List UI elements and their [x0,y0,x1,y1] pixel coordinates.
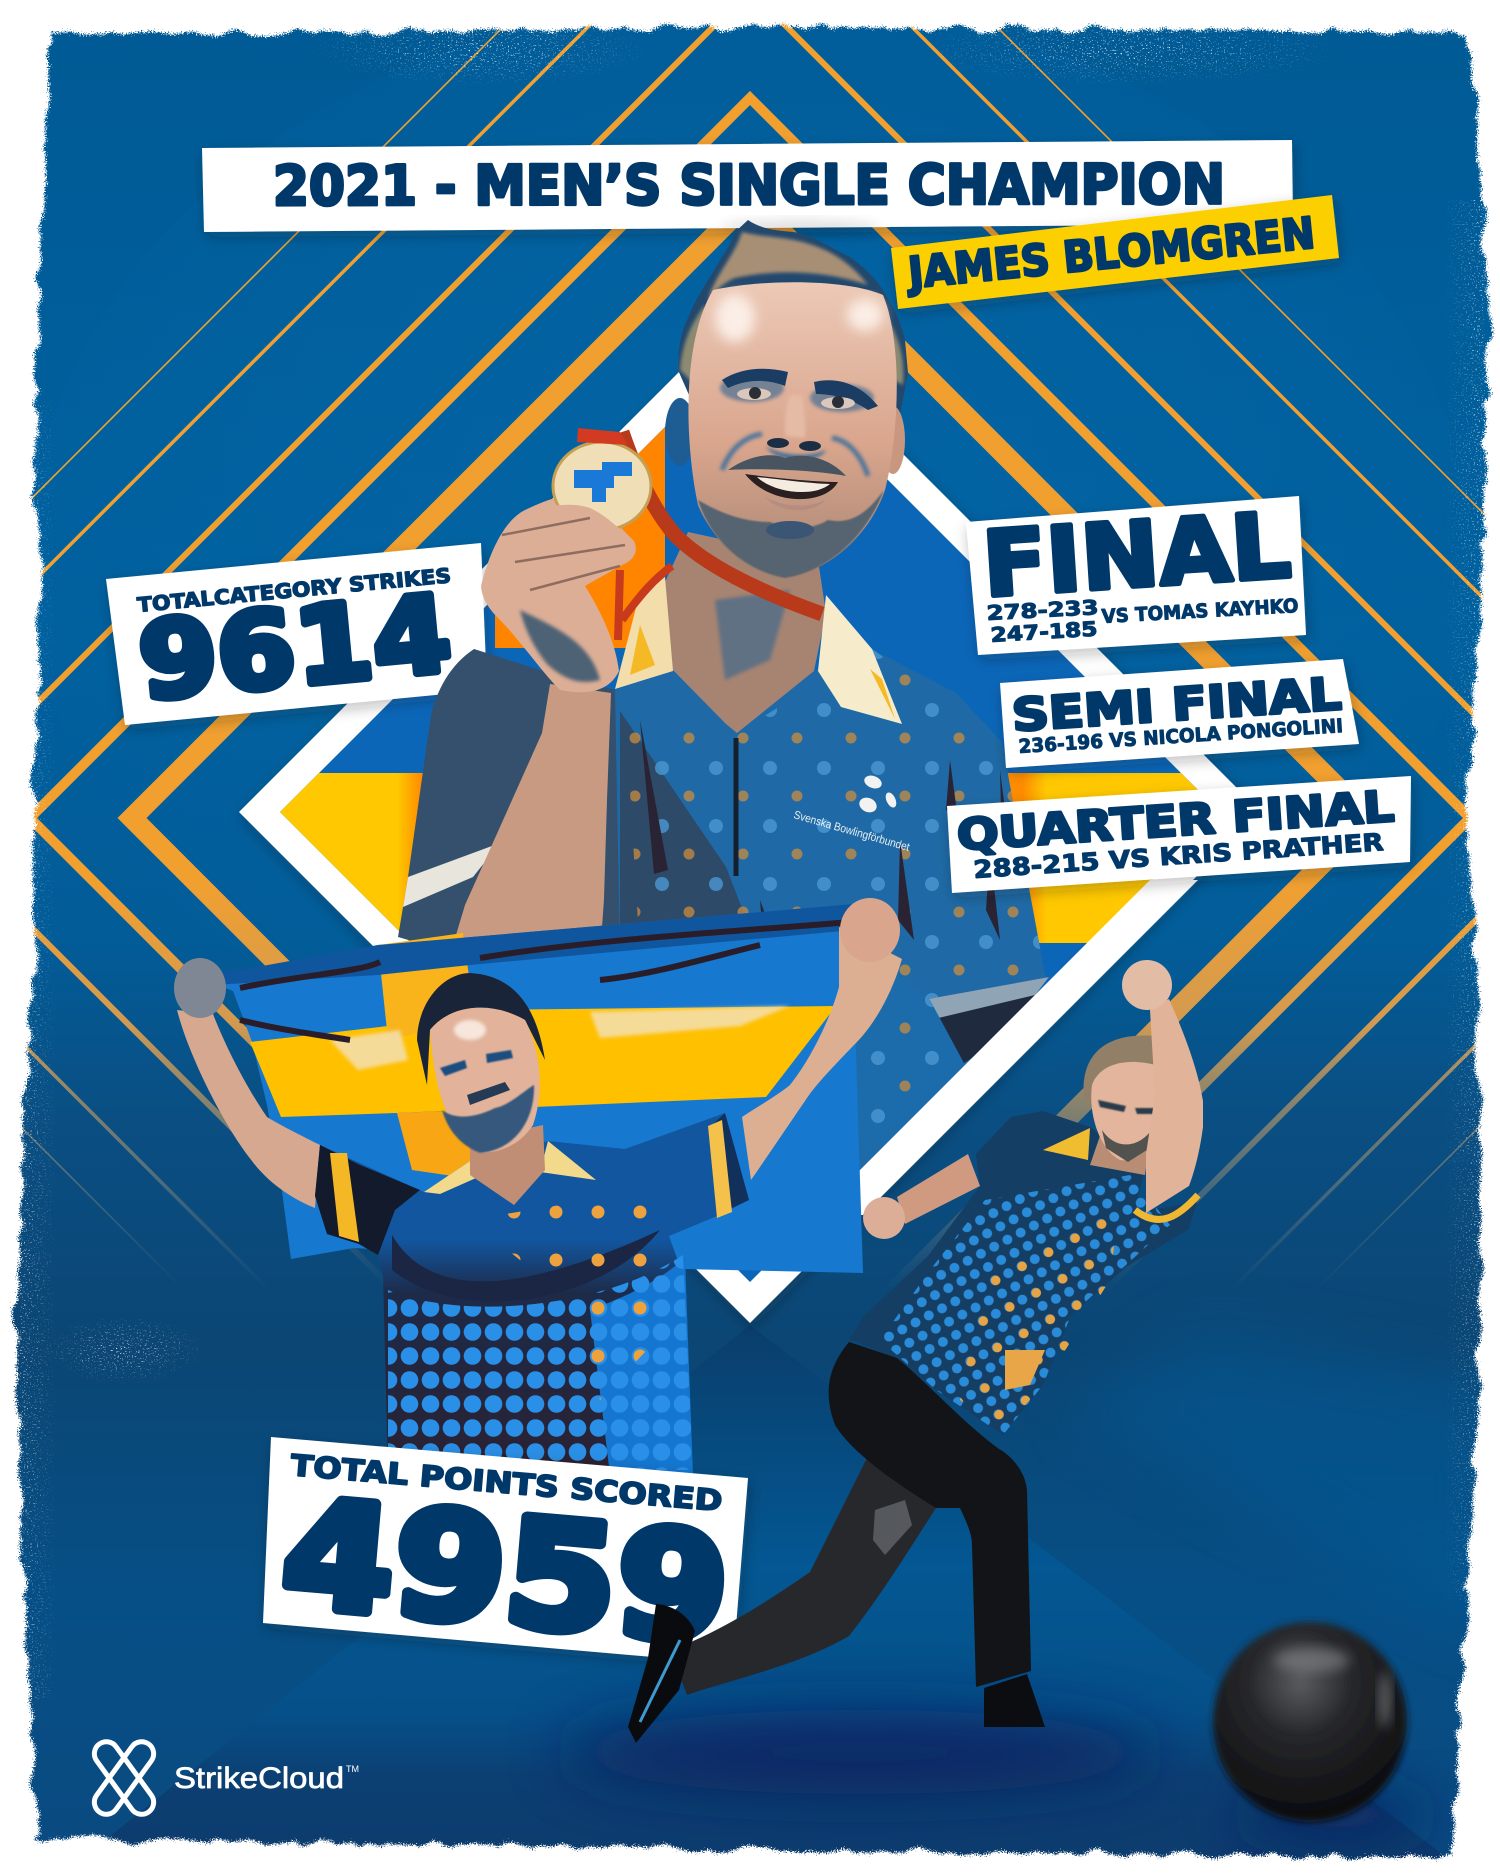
name text: JAMES BLOMGREN [903,209,1317,299]
moustache [467,1082,510,1105]
eye left [737,388,771,400]
flag highlights [330,1006,790,1070]
nostril right [799,441,821,451]
torso [615,649,1046,1170]
head and hair [665,220,908,578]
ball highlight right [1379,1672,1391,1728]
torso shadow streaks [640,720,1014,950]
front shoe [984,1674,1045,1727]
raised fist [1122,960,1172,1010]
dot one [862,773,884,791]
lower shirt dots [388,1255,693,1470]
brow right [814,380,878,410]
face [1091,1062,1157,1160]
iris left [749,387,761,399]
hand [481,493,636,692]
name background [891,195,1339,309]
right hand [840,898,900,962]
forehead highlight left [715,294,755,342]
points background [263,1437,748,1664]
rear shoe [628,1604,695,1743]
eyes [1098,1100,1155,1114]
rear leg [681,1440,960,1695]
ball body [1213,1622,1407,1822]
neck [1090,1130,1150,1175]
raised arm [1146,999,1203,1213]
neck [470,1125,545,1205]
torso dots [625,649,1046,1170]
medal [502,428,651,590]
flag top roll [213,904,853,985]
eye right [821,397,855,409]
shirt dots [880,1175,1170,1435]
medal emblem [574,462,632,502]
flag yellow vertical [378,933,475,1040]
moustache [728,455,846,476]
flag [213,904,863,1273]
lower lip [765,497,825,510]
beard [1102,1125,1155,1162]
cheek lines [722,434,868,476]
title background [202,140,1293,232]
hair [1084,1036,1155,1105]
flag yellow lower cross [397,1110,480,1180]
left sleeve [398,649,625,955]
shirt [849,1111,1197,1435]
lower shirt [850,940,965,1160]
shirt body [315,1113,749,1475]
ball highlight top [1274,1648,1350,1672]
figure: champion with medal [398,220,1049,1170]
left hand [174,958,226,1018]
eye socket right [810,384,874,412]
nose bridge highlight [785,395,805,438]
neck shadow [715,590,790,680]
floor shadow under ball [1235,1793,1435,1837]
inner diamond orange block [495,427,665,648]
semi result: 236-196 VS NICOLA PONGOLINI [1018,715,1344,758]
final opponent: VS TOMAS KAYHKO [1101,595,1299,628]
semi background [1000,659,1359,768]
beard [698,490,884,578]
logo stroke right [90,1737,158,1819]
sleeve trim [1135,1195,1198,1219]
flag roll folds [240,922,850,1040]
forehead highlight [454,1020,486,1040]
collar right [540,1141,596,1180]
strikes number: 9614 [134,572,456,724]
logo: StrikeCloud [90,1737,359,1819]
title box [202,140,1293,232]
eye socket left [720,374,784,402]
ribbon second strap [618,566,672,640]
result box: quarter final [947,776,1411,893]
speckle patch left [45,1316,205,1384]
nose shadow [766,446,826,460]
shirt federation text: Svenska Bowlingförbundet [792,809,912,854]
hair [678,220,908,430]
name banner [891,195,1339,309]
right arm [742,927,902,1180]
collar [1043,1128,1090,1160]
stripe 5 [132,200,1368,1436]
collar left [424,1161,476,1194]
quarter heading: QUARTER FINAL [955,782,1396,861]
extended fist [863,1197,905,1239]
left sleeve dark [315,1145,420,1255]
logo mark [90,1737,158,1819]
logo stroke left [90,1737,158,1819]
fingers over medal [525,505,634,566]
speckle top left [310,14,650,86]
logo text: StrikeCloud [174,1762,344,1795]
shirt orange dots [960,1195,1120,1430]
trademark: TM [346,1764,359,1774]
front leg [829,1342,1031,1687]
final score one: 278-233 [986,595,1099,625]
eyes [440,1050,513,1076]
result box: semi final [1000,659,1359,768]
points number: 4959 [276,1468,735,1677]
brow left [722,369,788,388]
quarter result: 288-215 VS KRIS PRATHER [973,828,1384,884]
pocket accessory [873,1500,912,1555]
hand shadow [520,610,600,682]
final heading: FINAL [980,493,1294,618]
white diamond [239,301,1261,1323]
lower sleeve band [928,977,1049,1020]
left sleeve stripe [330,1153,359,1242]
neck [665,532,826,733]
final score two: 247-185 [990,617,1098,647]
torso dark panel [620,711,760,955]
speckle top right [920,14,1340,86]
quarter background [947,776,1411,893]
white diagonal bar [815,880,1198,1215]
forearm [450,684,611,955]
shirt orange patch [1005,1350,1045,1390]
semi heading: SEMI FINAL [1010,667,1343,742]
right sleeve stripe [708,1120,732,1218]
points label: TOTAL POINTS SCORED [289,1448,724,1518]
dot two [857,795,879,815]
figure: champion with flag [174,898,902,1475]
final background [966,496,1306,655]
logo dots on shirt [857,773,898,815]
shirt orange dots [470,1190,675,1400]
strikes label: TOTALCATEGORY STRIKES [136,563,452,617]
ribbon [622,432,822,614]
lower shirt dots [850,940,965,1160]
bowling ball [1213,1622,1407,1822]
inner diamond blue [280,342,1220,1282]
stat box: total points [263,1437,748,1677]
head shadow on title [720,220,880,236]
rear shoe stripe [640,1640,680,1722]
title text: 2021 - MEN’S SINGLE CHAMPION [273,152,1225,218]
stripe 4 [30,98,1470,1538]
forehead highlight right [847,299,883,331]
face [688,282,897,577]
shoulder collar accent [630,625,895,719]
hair side tint [680,305,903,385]
medal ribbon loop [577,428,628,445]
floor shadow under bowler [560,1710,1160,1794]
iris right [832,396,844,408]
speckle right [1445,200,1485,1600]
left ear [665,398,695,466]
beard [442,1085,534,1153]
right ear [881,406,905,474]
hair [417,973,545,1085]
left arm [177,1010,320,1208]
inner diamond yellow band [280,773,1220,943]
background glow [30,0,1470,1120]
collar right [818,595,902,724]
face [430,1008,540,1153]
hair highlight [708,232,868,300]
lower shirt blue column [590,1258,693,1475]
chin patch [766,521,814,539]
extended arm [897,1154,980,1224]
collar left [615,577,673,689]
lower right sleeve [924,977,1049,1063]
lane floor [80,1325,1450,1860]
finger creases [502,518,625,590]
speckle left [20,400,56,1700]
lane right highlight [1067,1330,1500,1640]
sleeve white band [403,843,500,907]
medal disc [553,442,651,530]
stat box: total strikes [106,543,487,725]
chest fold [392,1230,660,1301]
mouth [745,474,838,499]
dot three [884,791,898,809]
teeth [757,477,830,492]
right sleeve cuff [712,1113,749,1208]
strikes background [106,543,487,725]
figure: bowler [628,960,1203,1743]
result box: final [966,493,1306,655]
flag yellow horizontal [250,1006,836,1117]
zipper [734,738,738,876]
nostril left [767,438,789,448]
